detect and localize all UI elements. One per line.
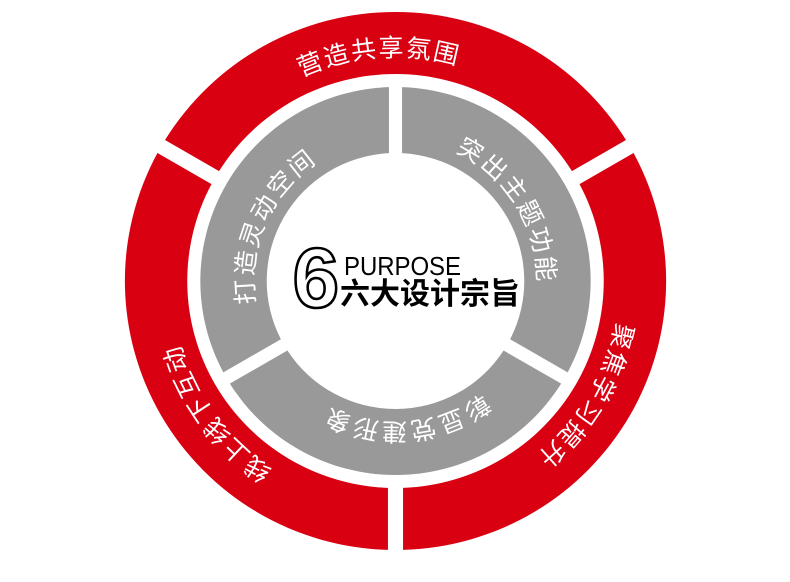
panel: inner ring, bottom segment [230, 350, 561, 475]
heading: 六大设计宗旨: 六大设计宗旨 [340, 278, 520, 311]
center title block [292, 231, 520, 325]
panel: outer ring, left segment [124, 153, 388, 550]
heading: PURPOSE: PURPOSE [344, 252, 461, 281]
numeral 6 outlined: 6 [292, 231, 339, 325]
panel: inner ring, upper-left segment [200, 87, 389, 372]
label: 突出主题功能: 突出主题功能 [456, 136, 558, 280]
panel: outer ring, top segment [165, 12, 626, 172]
label: 彰显党建形象: 彰显党建形象 [327, 396, 492, 444]
panel: inner ring, upper-right segment [402, 87, 591, 372]
label: 营造共享氛围: 营造共享氛围 [296, 35, 459, 78]
label: 线上线下互动: 线上线下互动 [162, 347, 272, 483]
label: 打造灵动空间: 打造灵动空间 [233, 148, 316, 304]
panel: outer ring, right segment [403, 153, 666, 550]
label: 聚焦学习提升: 聚焦学习提升 [540, 323, 636, 466]
